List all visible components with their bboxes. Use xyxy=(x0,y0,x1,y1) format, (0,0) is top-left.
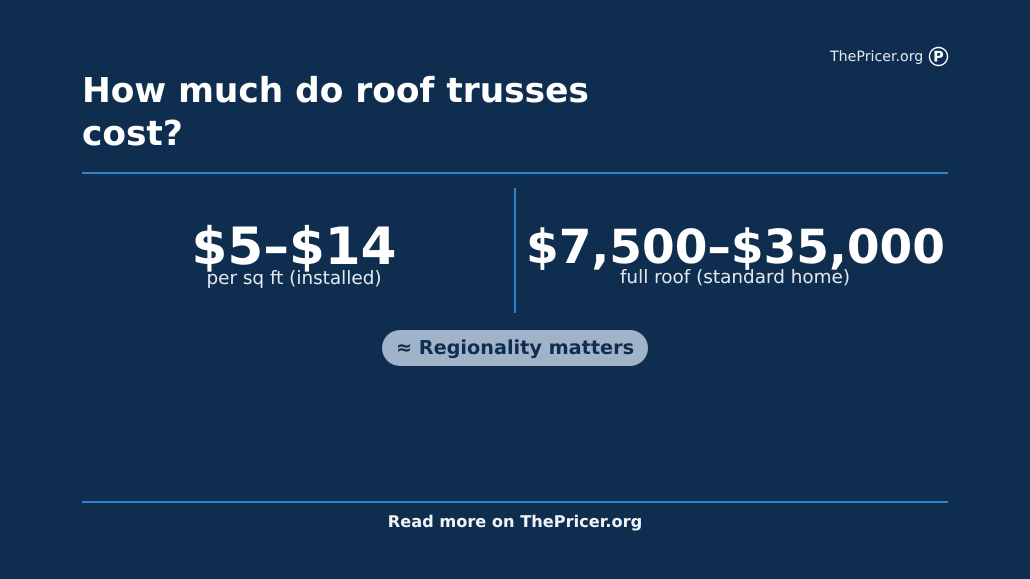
label: full roof: full roof (standard home) xyxy=(620,267,850,288)
stat: full roof price: $7,500–$35,000 xyxy=(526,220,945,275)
badge: regionality matters xyxy=(382,330,648,366)
label: per sq ft: per sq ft (installed) xyxy=(206,268,382,288)
title xyxy=(82,71,589,154)
stat: per sq ft price: $5–$14 xyxy=(192,217,396,277)
title: How much do roof trusses xyxy=(82,71,589,111)
brand: ThePricer.org: ThePricer.org xyxy=(830,48,923,64)
icon: P logo: P xyxy=(933,50,944,66)
footer link text: Read more on ThePricer.org xyxy=(388,512,642,530)
title: cost? xyxy=(82,114,183,154)
badge: regionality matters: ≈ Regionality matters xyxy=(396,336,634,359)
icon: P logo xyxy=(928,46,948,66)
